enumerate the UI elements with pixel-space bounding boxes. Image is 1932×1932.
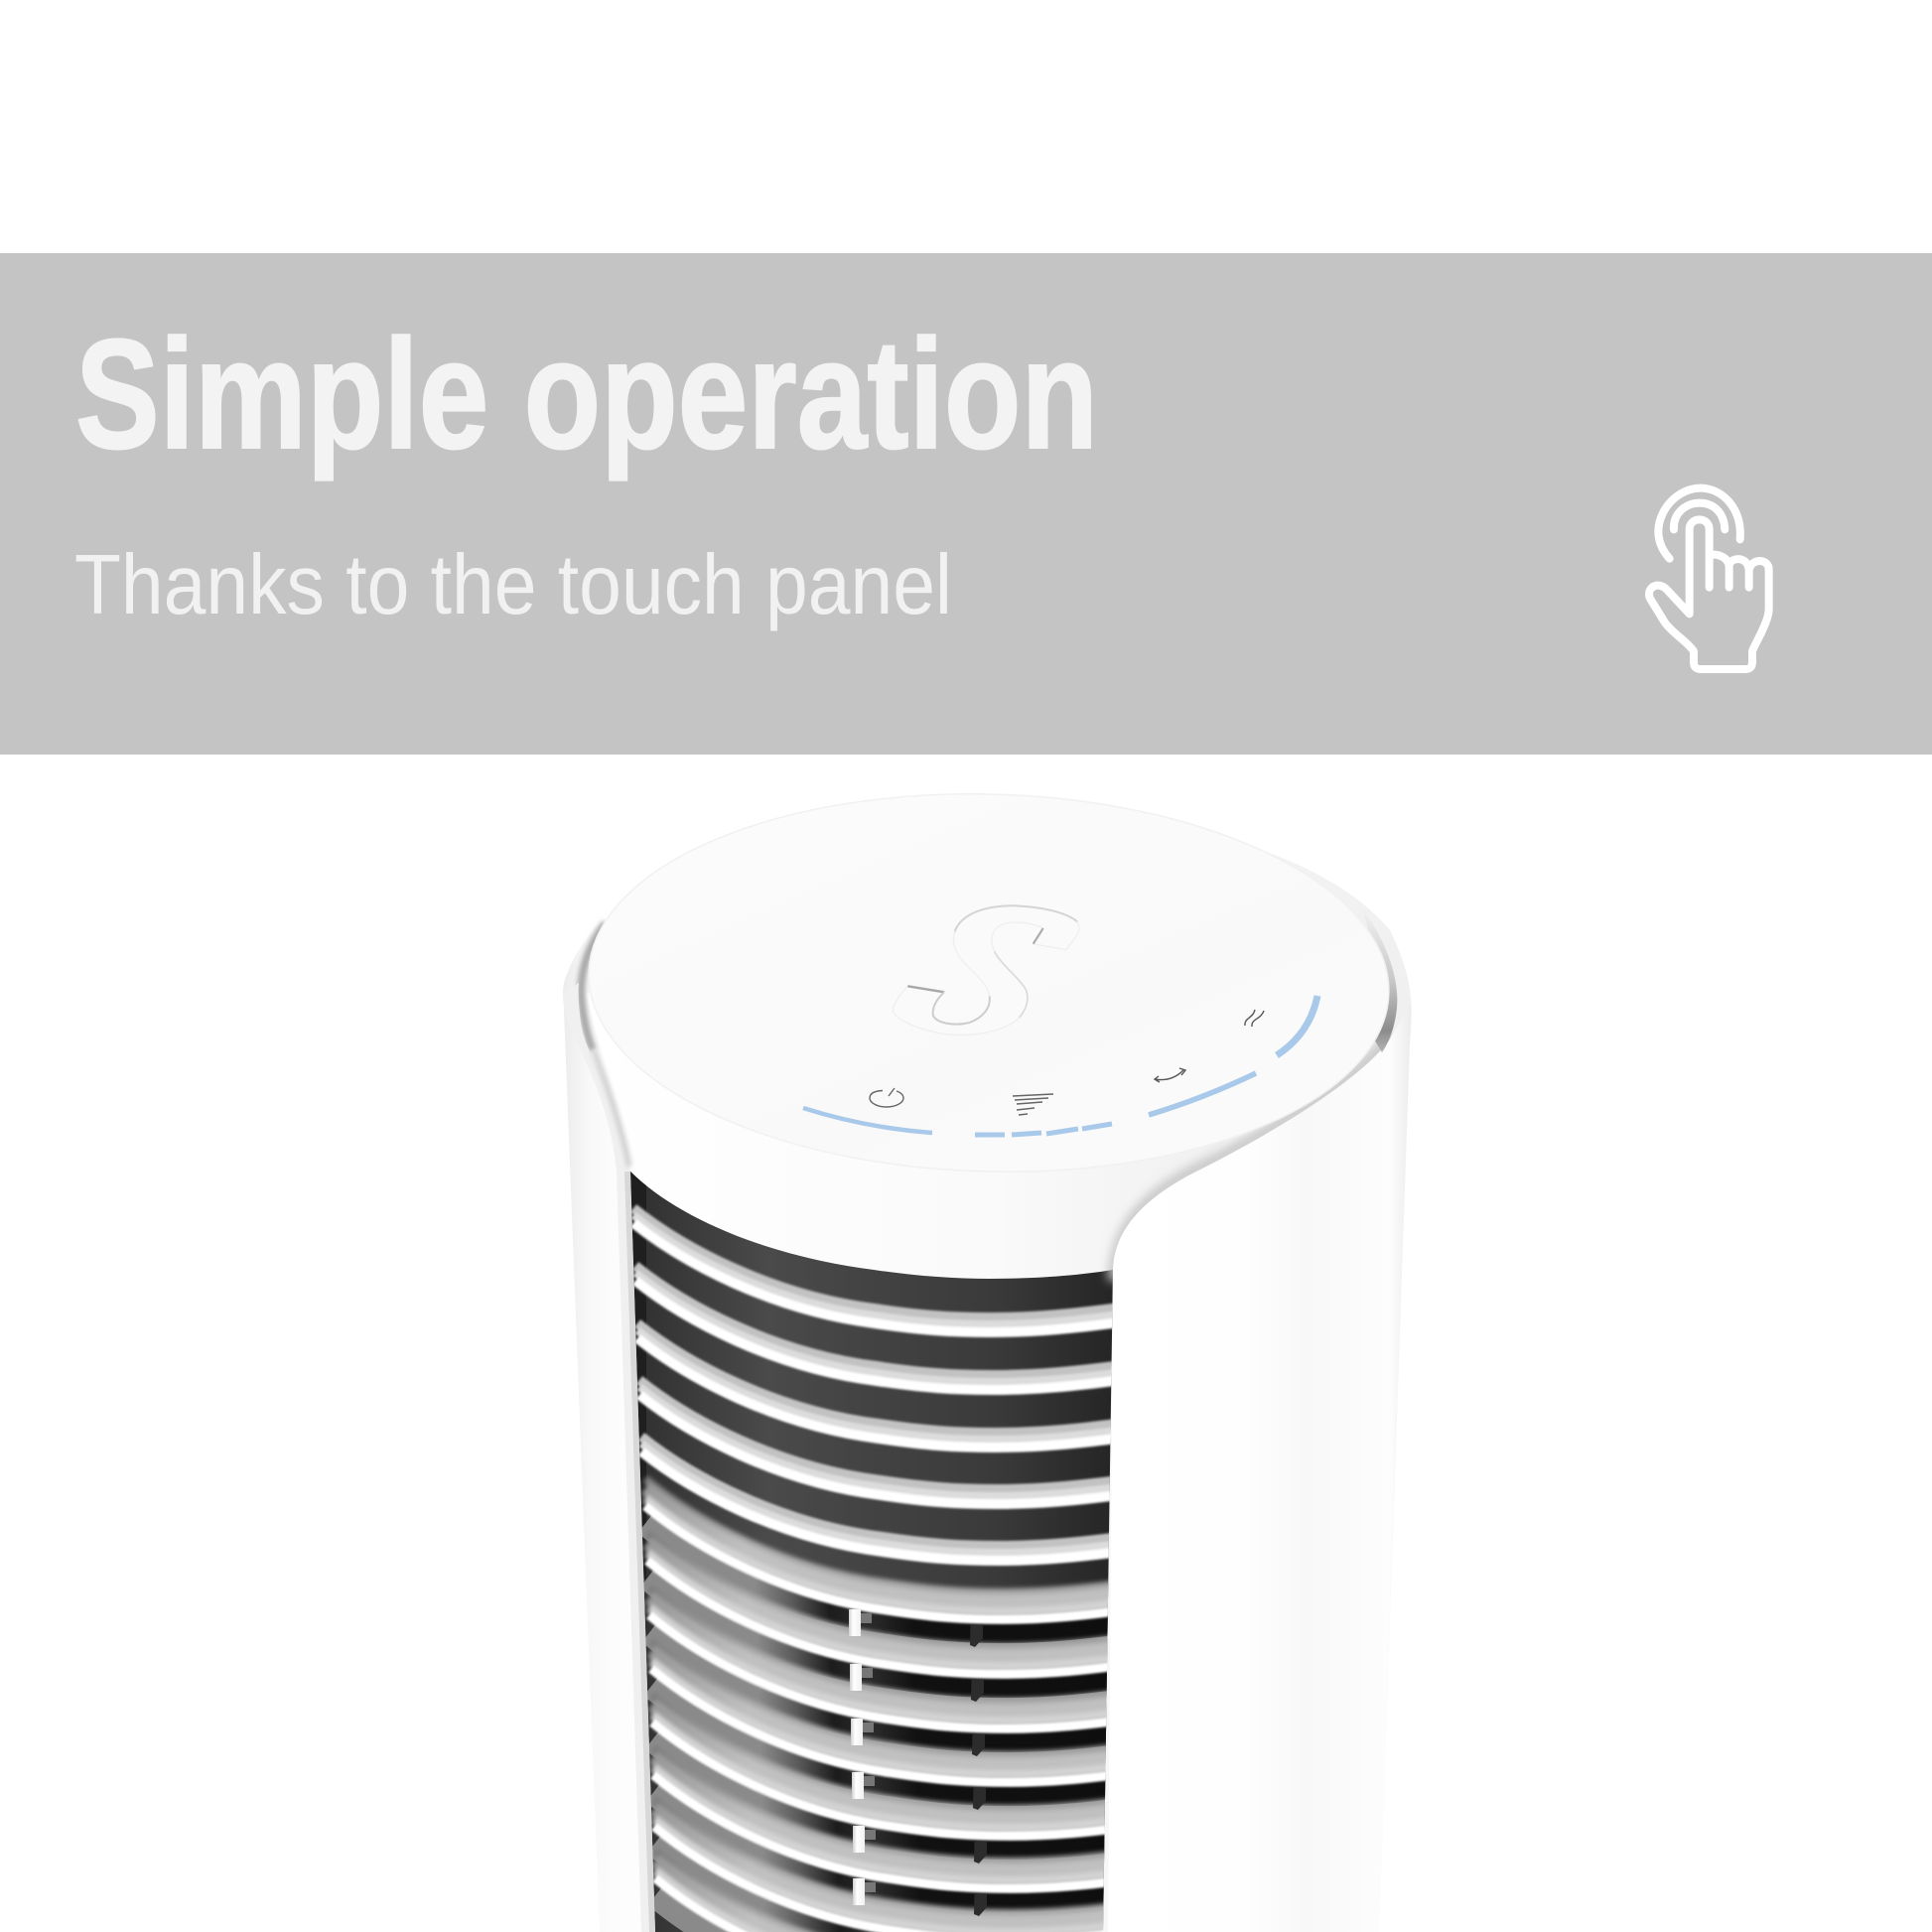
icon: wind mode <box>1245 1010 1264 1027</box>
panel: grey header banner <box>0 253 1932 755</box>
top disc <box>584 784 1394 1181</box>
left strip inner edge <box>627 1172 652 1932</box>
icon: touch hand <box>1649 488 1769 669</box>
left rim <box>564 983 655 1932</box>
fan outer shell <box>563 846 1412 1932</box>
icon: fan speed <box>1013 1094 1053 1115</box>
indicator: speed dashes <box>975 1124 1112 1135</box>
subtitle: Thanks to the touch panel <box>74 538 952 632</box>
panel: tower fan <box>563 784 1412 1932</box>
fan collar <box>586 993 1395 1291</box>
icon: power <box>870 1088 903 1107</box>
collar shadow beside rim <box>594 1050 629 1167</box>
indicator: oscillation arc <box>1149 1073 1256 1115</box>
disc contact shadow <box>1114 1037 1390 1281</box>
title: Simple operation <box>75 308 1098 482</box>
gap shadow right of disc <box>1362 908 1397 1052</box>
indicator: mode arc <box>1277 996 1317 1055</box>
left channel shadow <box>581 923 606 1050</box>
fan grille with louvers <box>616 1162 1142 1932</box>
logo: embossed S <box>893 905 1079 1035</box>
icon: oscillation <box>1155 1068 1185 1082</box>
indicator: power arc <box>803 1108 932 1133</box>
right body panel <box>1108 1003 1411 1932</box>
